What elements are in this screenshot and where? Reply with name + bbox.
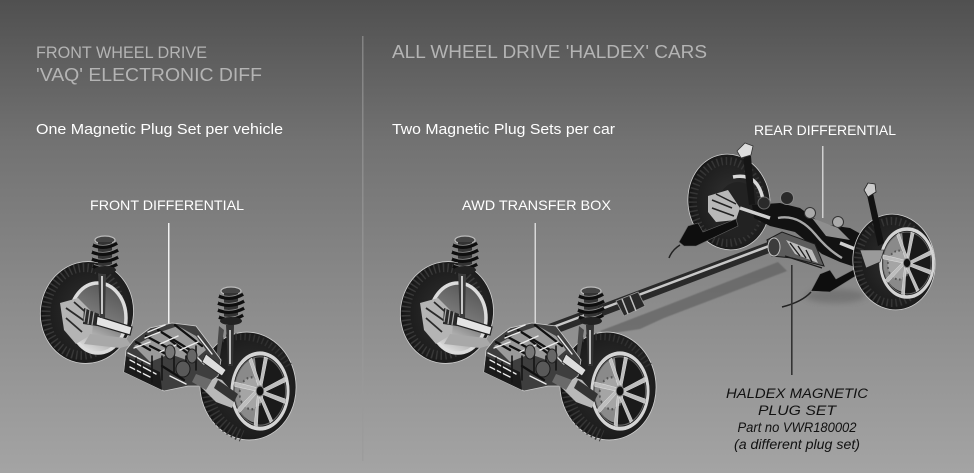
rear right strut — [867, 193, 884, 246]
divider — [362, 36, 364, 461]
leader line: rear differential — [822, 146, 824, 218]
heading: front wheel drive — [36, 43, 262, 85]
panel: all wheel drive — [392, 42, 941, 452]
leader line: transfer box — [534, 223, 536, 324]
label: rear differential: REAR DIFFERENTIAL — [754, 122, 896, 138]
label: awd transfer box: AWD TRANSFER BOX — [462, 197, 612, 213]
heading: front wheel drive: FRONT WHEEL DRIVE — [36, 43, 207, 62]
rear shadow — [805, 289, 865, 303]
illustration: front axle — [34, 236, 301, 445]
callout: haldex magnetic plug set: Part no VWR180002 — [738, 420, 857, 435]
illustration: rear axle — [669, 143, 941, 315]
rear subframe — [752, 203, 868, 268]
callout: haldex magnetic plug set: PLUG SET — [758, 403, 838, 418]
propshaft shadow — [600, 262, 787, 334]
heading: all wheel drive: ALL WHEEL DRIVE 'HALDEX' CARS — [392, 42, 707, 62]
rear far wheel — [682, 149, 776, 255]
rear left strut — [743, 156, 755, 205]
illustration: front axle with transfer box — [394, 236, 661, 445]
label: front differential: FRONT DIFFERENTIAL — [90, 197, 244, 213]
subheading: front: One Magnetic Plug Set per vehicle — [36, 122, 283, 138]
leader line: haldex plug — [791, 265, 793, 375]
callout: haldex magnetic plug set — [726, 386, 868, 452]
leader line: front differential — [168, 223, 170, 325]
callout: haldex magnetic plug set: (a different plug set) — [734, 437, 860, 452]
rear trailing arms — [679, 219, 738, 246]
subheading: awd: Two Magnetic Plug Sets per car — [392, 122, 615, 138]
heading: front wheel drive: 'VAQ' ELECTRONIC DIFF — [36, 65, 262, 85]
callout: haldex magnetic plug set: HALDEX MAGNETIC — [726, 386, 868, 401]
panel: front wheel drive — [34, 43, 301, 445]
propshaft — [546, 242, 772, 336]
haldex unit — [767, 232, 824, 266]
rear near wheel — [847, 209, 941, 315]
